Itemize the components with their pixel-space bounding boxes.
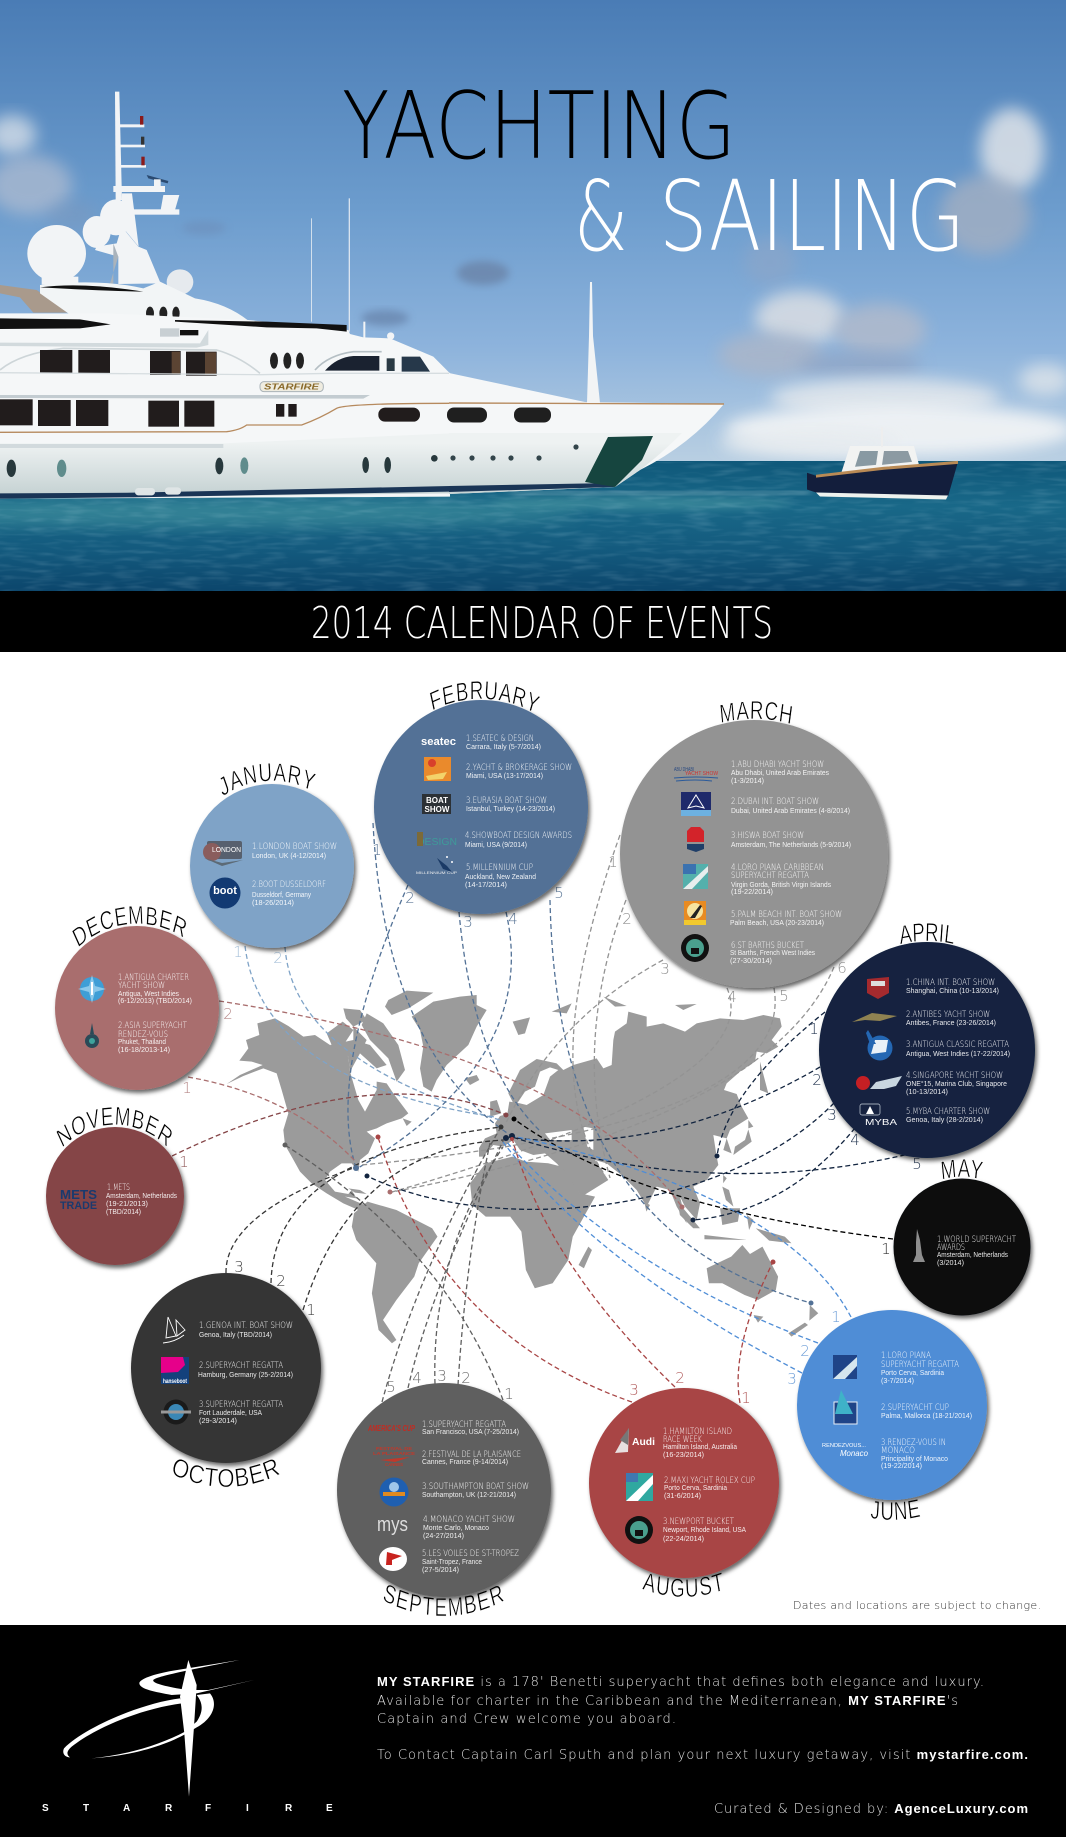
route numbers: 1 xyxy=(179,1153,189,1171)
event 4: Loro Piana Caribbean Superyacht Regatta xyxy=(683,863,831,896)
panel: August xyxy=(588,1388,784,1597)
panel: December xyxy=(54,906,224,1096)
event 1: Antigua Charter Yacht Show: YACHT SHOW xyxy=(118,981,165,991)
event 1: Genoa International Boat Show: 1.GENOA INT. BOAT SHOW xyxy=(199,1321,293,1331)
disc xyxy=(589,1388,779,1578)
event 3: Eurasia Boat Show xyxy=(422,794,555,814)
event 1: METS: 1.METS xyxy=(107,1183,130,1193)
route numbers: 5 xyxy=(779,987,789,1005)
event 1: Loro Piana Superyacht Regatta: SUPERYACHT REGATTA xyxy=(881,1360,959,1370)
disc xyxy=(337,1383,551,1597)
route numbers: 2 xyxy=(276,1272,286,1290)
event 5: MYBA Charter Show xyxy=(860,1104,990,1127)
month label: October xyxy=(173,1459,280,1488)
event 3: Rendez-Vous in Monaco: MONACO xyxy=(881,1446,915,1456)
event 2: Dubai International Boat Show: 2.DUBAI INT. BOAT SHOW xyxy=(731,797,819,807)
event 1: Seatec: seatec xyxy=(421,736,456,748)
event 1: Loro Piana Superyacht Regatta xyxy=(833,1351,959,1385)
event 3: Newport Bucket: 3.NEWPORT BUCKET xyxy=(663,1517,735,1527)
event 4: Showboat Design Awards xyxy=(417,831,572,849)
event 3: Fort Lauderdale Superyacht Regatta: (29-3/2014) xyxy=(199,1418,237,1425)
event 2: Asia Superyacht Rendez-Vous xyxy=(85,1021,188,1054)
event 1: London Boat Show xyxy=(203,841,337,866)
event 1: METS: Amsterdam, Netherlands xyxy=(106,1193,177,1200)
event 3: HISWA Boat Show xyxy=(687,827,851,852)
event 1: World Superyacht Awards xyxy=(913,1229,1017,1267)
event 4: Monaco Yacht Show xyxy=(377,1514,515,1540)
event 3: Southampton Boat Show: 3.SOUTHAMPTON BOAT SHOW xyxy=(422,1482,529,1492)
routes: June xyxy=(503,1135,851,1373)
main yacht: aft section with mast and domes xyxy=(0,92,450,499)
event 1: Abu Dhabi Yacht Show: Abu Dhabi, United Arab Emirates xyxy=(731,770,829,777)
route numbers: 4 xyxy=(412,1369,422,1387)
event 3: Antigua Classic Regatta: 3.ANTIGUA CLASSIC REGATTA xyxy=(906,1040,1009,1050)
route numbers: 1 xyxy=(233,943,243,961)
route numbers: 4 xyxy=(508,910,518,928)
event 1: Abu Dhabi Yacht Show: YACHT SHOW xyxy=(685,771,718,777)
event 1: Antigua Charter Yacht Show: (6-12/2013) (TBD/2014) xyxy=(118,998,192,1005)
title: and Sailing xyxy=(574,160,965,273)
event 2: Asia Superyacht Rendez-Vous: (16-18/2013-14) xyxy=(118,1047,170,1054)
route numbers: 2 xyxy=(273,949,283,967)
routes: January xyxy=(245,946,500,1120)
event 1: Hamilton Island Race Week xyxy=(615,1427,737,1459)
logo: Starfire xyxy=(42,1660,333,1814)
month label: March: MARCH xyxy=(720,702,792,724)
event 3: Eurasia Boat Show: Istanbul, Turkey (14-23/2014) xyxy=(466,806,555,813)
event 2: Antibes Yacht Show: Antibes, France (23-26/2014) xyxy=(906,1020,996,1027)
event 1: Abu Dhabi Yacht Show: 1.ABU DHABI YACHT SHOW xyxy=(731,760,824,770)
event 1: London Boat Show: LONDON xyxy=(212,845,241,854)
event 2: Festival de la Plaisance: FESTIVAL DE xyxy=(376,1446,412,1451)
event 1: Genoa International Boat Show: Genoa, Italy (TBD/2014) xyxy=(199,1332,272,1339)
event 1: METS: (19-21/2013) xyxy=(106,1201,148,1208)
disc xyxy=(819,942,1035,1158)
event 3: Eurasia Boat Show: SHOW xyxy=(425,805,450,814)
portholes xyxy=(7,455,438,477)
deck 1 windows xyxy=(0,399,420,427)
event 1: America's Cup Superyacht Regatta: AMERICA'S CUP xyxy=(367,1424,415,1433)
event 3: Rendez-Vous in Monaco: 3.RENDEZ-VOUS IN xyxy=(881,1438,946,1448)
event 1: London Boat Show: 1.LONDON BOAT SHOW xyxy=(252,842,337,852)
route numbers xyxy=(179,841,922,1407)
month label: May xyxy=(941,1159,984,1179)
event 1: China International Boat Show: 1.CHINA INT. BOAT SHOW xyxy=(906,978,995,988)
event 1: Hamilton Island Race Week: RACE WEEK xyxy=(663,1435,702,1445)
month label: April xyxy=(900,923,954,944)
month label: December: DECEMBER xyxy=(72,906,186,947)
route numbers: 5 xyxy=(554,884,564,902)
event 4: Showboat Design Awards: DESIGN xyxy=(417,837,457,848)
event 5: Palm Beach International Boat Show: 5.PALM BEACH INT. BOAT SHOW xyxy=(731,910,842,920)
event 5: Les Voiles de St-Tropez xyxy=(379,1547,519,1574)
event 3: Southampton Boat Show xyxy=(380,1478,529,1506)
event 4: Showboat Design Awards: Miami, USA (9/2014) xyxy=(465,842,527,849)
panel: March xyxy=(618,702,894,994)
route numbers: 1 xyxy=(504,1385,514,1403)
route numbers: 1 xyxy=(372,841,382,859)
event 5: MYBA Charter Show: Genoa, Italy (28-2/2014) xyxy=(906,1117,983,1124)
event 5: Palm Beach International Boat Show: Palm Beach, USA (20-23/2014) xyxy=(730,920,824,927)
month label: August: AUGUST xyxy=(642,1572,722,1597)
event 4: Loro Piana Caribbean Superyacht Regatta: SUPERYACHT REGATTA xyxy=(731,871,809,881)
event 1: Abu Dhabi Yacht Show: ABU DHABI xyxy=(674,767,694,773)
routes: September xyxy=(285,1127,505,1402)
routes: August xyxy=(378,1137,773,1403)
event 4: Singapore Yacht Show: ONE°15, Marina Club, Singapore xyxy=(906,1080,1007,1088)
routes: April xyxy=(367,1012,913,1220)
month label: September xyxy=(384,1585,504,1616)
event 1: METS: METS xyxy=(60,1187,97,1202)
event 2: Hanseboot Superyacht Regatta xyxy=(161,1357,293,1385)
event 1: METS: TRADE xyxy=(60,1200,97,1212)
title: Yachting: YACHTING xyxy=(342,72,736,180)
disclaimer note: Dates and locations are subject to change. xyxy=(793,1599,1041,1612)
logo: Starfire: STARFIRE xyxy=(42,1803,333,1814)
event 4: Monaco Yacht Show: 4.MONACO YACHT SHOW xyxy=(423,1515,515,1525)
event 2: Maxi Yacht Rolex Cup: Porto Cerva, Sardinia xyxy=(664,1485,727,1492)
event 1: METS: (TBD/2014) xyxy=(106,1209,141,1216)
event 1: Hamilton Island Race Week: Audi xyxy=(632,1437,655,1448)
deck 2 windows xyxy=(40,350,217,376)
month label: February xyxy=(430,681,540,712)
event 4: Loro Piana Caribbean Superyacht Regatta: 4.LORO PIANA CARIBBEAN xyxy=(731,863,824,873)
event 1: World Superyacht Awards: AWARDS xyxy=(937,1243,965,1253)
event 2: Boot Dusseldorf: 2.BOOT DUSSELDORF xyxy=(252,880,326,890)
event 2: Festival de la Plaisance: Cannes, France (9-14/2014) xyxy=(422,1459,508,1466)
banner: 2014 calendar of events: 2014 CALENDAR OF EVENTS xyxy=(311,598,773,649)
footer panel xyxy=(0,1625,1066,1837)
month label: November xyxy=(56,1107,172,1146)
route numbers: 1 xyxy=(741,1389,751,1407)
route numbers: 1 xyxy=(881,1240,891,1258)
routes: February xyxy=(348,823,811,1303)
event 1: Abu Dhabi Yacht Show: (1-3/2014) xyxy=(731,778,764,785)
route numbers: 1 xyxy=(182,1079,192,1097)
event 2: Festival de la Plaisance: CANNES xyxy=(385,1462,403,1467)
route numbers: 1 xyxy=(608,853,618,871)
panel: November xyxy=(45,1107,189,1271)
event 1: World Superyacht Awards: 1.WORLD SUPERYACHT xyxy=(937,1235,1017,1245)
month label: September: SEPTEMBER xyxy=(384,1585,504,1616)
event 3: Antigua Classic Regatta xyxy=(866,1030,1010,1060)
about text xyxy=(377,1674,1028,1763)
routes: December xyxy=(188,1001,682,1207)
event 2: Festival de la Plaisance: LA PLAISANCE xyxy=(373,1451,415,1456)
event 5: Palm Beach International Boat Show xyxy=(684,901,842,927)
route numbers: 3 xyxy=(629,1381,639,1399)
disc xyxy=(131,1273,321,1463)
mast and radar arch xyxy=(27,92,394,340)
route numbers: 2 xyxy=(622,910,632,928)
event 5: Les Voiles de St-Tropez: Saint-Tropez, France xyxy=(422,1559,482,1566)
event 6: St Barths Bucket xyxy=(681,934,815,965)
event 3: Rendez-Vous in Monaco: Monaco xyxy=(840,1449,869,1458)
event 1: Seatec xyxy=(421,734,541,751)
event 6: St Barths Bucket: 6.ST BARTHS BUCKET xyxy=(731,941,805,951)
event 3: Rendez-Vous in Monaco: RENDEZVOUS... xyxy=(822,1443,866,1449)
month label: February: FEBRUARY xyxy=(430,681,540,712)
superstructure and hull body xyxy=(0,313,450,499)
panel: January xyxy=(189,763,359,954)
month label: May: MAY xyxy=(941,1159,984,1179)
month label: January: JANUARY xyxy=(220,763,316,796)
location dots xyxy=(282,1112,814,1306)
title: and Sailing: & xyxy=(574,160,628,273)
event 1: Hamilton Island Race Week: (16-23/2014) xyxy=(663,1452,704,1459)
event 1: Abu Dhabi Yacht Show xyxy=(674,760,829,785)
event 3: HISWA Boat Show: Amsterdam, The Netherlands (5-9/2014) xyxy=(731,842,851,849)
event 2: Antibes Yacht Show xyxy=(852,1010,996,1027)
event 1: Antigua Charter Yacht Show: 1.ANTIGUA CHARTER xyxy=(118,973,189,983)
event 2: Superyacht Cup: Palma, Mallorca (18-21/2014) xyxy=(881,1413,972,1420)
panel: October xyxy=(130,1272,326,1488)
banner: 2014 calendar of events xyxy=(0,591,1066,652)
event 2: Boot Dusseldorf: boot xyxy=(213,885,237,897)
event 2: Dubai International Boat Show xyxy=(681,792,850,816)
event 5: Millennium Cup: 5.MILLENNIUM CUP xyxy=(466,863,533,873)
event 2: Festival de la Plaisance: 2.FESTIVAL DE LA PLAISANCE xyxy=(422,1450,521,1460)
disc xyxy=(190,784,354,948)
disc xyxy=(374,700,588,914)
event 2: Superyacht Cup: 2.SUPERYACHT CUP xyxy=(881,1403,949,1413)
title: and Sailing: SAILING xyxy=(659,160,965,273)
route numbers: 4 xyxy=(850,1131,860,1149)
route numbers: 2 xyxy=(461,1369,471,1387)
event 3: Rendez-Vous in Monaco: Principality of Monaco xyxy=(881,1456,948,1463)
disc xyxy=(797,1310,987,1500)
event 3: Eurasia Boat Show: 3.EURASIA BOAT SHOW xyxy=(466,796,547,806)
event 5: Millennium Cup: Auckland, New Zealand xyxy=(465,874,536,881)
about text: Available for charter in the Caribbean and the Mediterranean, MY STARFIRE's xyxy=(377,1693,958,1709)
event 3: Fort Lauderdale Superyacht Regatta: Fort Lauderdale, USA xyxy=(199,1410,262,1417)
event 6: St Barths Bucket: (27-30/2014) xyxy=(730,958,772,965)
month label: June xyxy=(870,1499,920,1520)
event 3: Rendez-Vous in Monaco: (19-22/2014) xyxy=(881,1463,922,1470)
panel: February xyxy=(372,681,594,920)
route numbers: 3 xyxy=(463,913,473,931)
route numbers: 6 xyxy=(837,959,847,977)
route numbers: 3 xyxy=(660,960,670,978)
event 5: MYBA Charter Show: MYBA xyxy=(865,1118,898,1127)
event 5: Les Voiles de St-Tropez: (27-5/2014) xyxy=(422,1567,459,1574)
route numbers: 2 xyxy=(405,889,415,907)
event 2: Yacht and Brokerage Show xyxy=(424,757,572,781)
route numbers: 3 xyxy=(787,1370,797,1388)
route numbers: 1 xyxy=(831,1308,841,1326)
event 2: Maxi Yacht Rolex Cup: (31-6/2014) xyxy=(664,1493,701,1500)
event 4: Monaco Yacht Show: Monte Carlo, Monaco xyxy=(423,1525,489,1532)
world map xyxy=(227,991,818,1343)
event 1: Hamilton Island Race Week: Hamilton Island, Australia xyxy=(663,1444,737,1451)
route lines from each month to its event locations xyxy=(172,823,913,1403)
event 1: China International Boat Show xyxy=(867,977,999,999)
event 2: Maxi Yacht Rolex Cup xyxy=(626,1473,755,1501)
route numbers: 3 xyxy=(234,1258,244,1276)
event 4: Singapore Yacht Show: 4.SINGAPORE YACHT SHOW xyxy=(906,1071,1003,1081)
event 3: Newport Bucket: (22-24/2014) xyxy=(663,1536,704,1543)
panel: September xyxy=(336,1382,556,1616)
credit: Curated & Designed by: AgenceLuxury.com xyxy=(714,1801,1028,1817)
route numbers: 3 xyxy=(827,1106,837,1124)
disc xyxy=(894,1178,1030,1316)
month label: November: NOVEMBER xyxy=(56,1107,172,1146)
route numbers: 2 xyxy=(223,1005,233,1023)
event 5: Millennium Cup: (14-17/2014) xyxy=(465,882,507,889)
event 2: Yacht and Brokerage Show: Miami, USA (13-17/2014) xyxy=(466,773,543,780)
event 1: Seatec: 1.SEATEC & DESIGN xyxy=(466,734,534,744)
bimini canopy xyxy=(0,285,68,313)
small tender boat xyxy=(510,427,958,499)
event 2: Hanseboot Superyacht Regatta: Hamburg, Germany (25-2/2014) xyxy=(198,1372,293,1379)
panel: May xyxy=(892,1159,1036,1322)
event 3: Newport Bucket: Newport, Rhode Island, USA xyxy=(663,1527,746,1534)
routes: March xyxy=(361,835,834,1192)
event 1: Hamilton Island Race Week: 1.HAMILTON ISLAND xyxy=(663,1427,732,1437)
hero photo: yacht at sea xyxy=(0,0,1066,591)
route numbers: 1 xyxy=(306,1301,316,1319)
event 3: Newport Bucket xyxy=(625,1516,746,1544)
event 2: Maxi Yacht Rolex Cup: 2.MAXI YACHT ROLEX CUP xyxy=(664,1476,755,1486)
event 2: Antibes Yacht Show: 2.ANTIBES YACHT SHOW xyxy=(906,1010,990,1020)
event 1: Antigua Charter Yacht Show: Antigua, West Indies xyxy=(118,991,179,998)
event 1: America's Cup Superyacht Regatta: San Francisco, USA (7-25/2014) xyxy=(422,1429,519,1436)
panel: April xyxy=(818,923,1040,1164)
name plate xyxy=(260,382,323,392)
event 5: Millennium Cup: MILLENNIUM CUP xyxy=(416,870,457,875)
top deck xyxy=(40,282,248,321)
event 1: Genoa International Boat Show xyxy=(163,1317,293,1343)
event 3: HISWA Boat Show: 3.HISWA BOAT SHOW xyxy=(731,831,804,841)
route numbers: 3 xyxy=(437,1367,447,1385)
routes: October xyxy=(226,1127,503,1310)
event 2: Dubai International Boat Show: Dubai, United Arab Emirates (4-8/2014) xyxy=(731,808,850,815)
event 3: Southampton Boat Show: Southampton, UK (12-21/2014) xyxy=(422,1492,516,1499)
event 3: Eurasia Boat Show: BOAT xyxy=(426,796,448,805)
route numbers: 5 xyxy=(912,1155,922,1173)
event 5: Millennium Cup xyxy=(416,856,536,889)
event 2: Superyacht Cup xyxy=(834,1390,972,1424)
event 5: MYBA Charter Show: 5.MYBA CHARTER SHOW xyxy=(906,1107,990,1117)
about text: Captain and Crew welcome you aboard. xyxy=(377,1712,676,1727)
event 2: Hanseboot Superyacht Regatta: 2.SUPERYACHT REGATTA xyxy=(199,1361,283,1371)
event 3: Antigua Classic Regatta: Antigua, West Indies (17-22/2014) xyxy=(906,1051,1010,1058)
event 4: Monaco Yacht Show: (24-27/2014) xyxy=(423,1533,464,1540)
event 4: Showboat Design Awards: 4.SHOWBOAT DESIGN AWARDS xyxy=(465,831,572,841)
month label: January xyxy=(220,763,316,796)
event 4: Singapore Yacht Show xyxy=(856,1071,1007,1096)
event 3: Rendez-Vous in Monaco xyxy=(822,1438,948,1470)
event 3: Fort Lauderdale Superyacht Regatta xyxy=(161,1400,283,1425)
about text: To Contact Captain Carl Sputh and plan your next luxury getaway, visit mystarfire.com. xyxy=(377,1747,1028,1763)
route numbers: 5 xyxy=(386,1378,396,1396)
event 2: Boot Dusseldorf: (18-26/2014) xyxy=(252,900,294,907)
event 4: Singapore Yacht Show: (10-13/2014) xyxy=(906,1089,948,1096)
route numbers: 1 xyxy=(809,1020,819,1038)
event 1: China International Boat Show: Shanghai, China (10-13/2014) xyxy=(906,988,999,995)
event 2: Hanseboot Superyacht Regatta: hanseboot xyxy=(163,1378,188,1385)
event 3: Fort Lauderdale Superyacht Regatta: 3.SUPERYACHT REGATTA xyxy=(199,1400,283,1410)
event 1: Loro Piana Superyacht Regatta: 1.LORO PIANA xyxy=(881,1351,931,1361)
event 1: America's Cup Superyacht Regatta: 1.SUPERYACHT REGATTA xyxy=(422,1420,506,1430)
month label: April: APRIL xyxy=(900,923,954,944)
name plate: STARFIRE xyxy=(264,382,320,391)
event 1: METS xyxy=(60,1183,177,1216)
event 2: Festival de la Plaisance xyxy=(373,1446,521,1467)
routes: May xyxy=(514,1119,893,1239)
month label: August xyxy=(642,1572,722,1597)
main yacht: bow section xyxy=(447,282,724,494)
event 2: Asia Superyacht Rendez-Vous: Phuket, Thailand xyxy=(118,1039,166,1046)
event 4: Loro Piana Caribbean Superyacht Regatta: Virgin Gorda, British Virgin Islands xyxy=(731,882,831,889)
event 1: Antigua Charter Yacht Show xyxy=(78,973,192,1005)
event 2: Boot Dusseldorf: Dusseldorf, Germany xyxy=(252,892,311,899)
event 6: St Barths Bucket: St Barths, French West Indies xyxy=(730,950,815,957)
month label: June: JUNE xyxy=(870,1499,920,1520)
event 2: Asia Superyacht Rendez-Vous: RENDEZ-VOUS xyxy=(118,1030,168,1040)
disc xyxy=(55,926,219,1090)
event 2: Yacht and Brokerage Show: 2.YACHT & BROKERAGE SHOW xyxy=(466,763,572,773)
event 5: Les Voiles de St-Tropez: 5.LES VOILES DE ST-TROPEZ xyxy=(422,1549,519,1559)
event 1: America's Cup Superyacht Regatta xyxy=(367,1420,519,1436)
event 2: Boot Dusseldorf xyxy=(210,878,326,908)
disc xyxy=(620,720,888,988)
event 1: World Superyacht Awards: Amsterdam, Netherlands xyxy=(937,1252,1008,1259)
route numbers: 2 xyxy=(675,1369,685,1387)
month label: March xyxy=(720,702,792,724)
month label: October: OCTOBER xyxy=(173,1459,280,1488)
about text: MY STARFIRE is a 178' Benetti superyacht that defines both elegance and luxury. xyxy=(377,1674,984,1690)
event 2: Asia Superyacht Rendez-Vous: 2.ASIA SUPERYACHT xyxy=(118,1021,188,1031)
event 1: World Superyacht Awards: (3/2014) xyxy=(937,1260,964,1267)
event 1: Seatec: Carrara, Italy (5-7/2014) xyxy=(466,744,541,751)
panel: June xyxy=(796,1310,992,1520)
route numbers: 4 xyxy=(727,988,737,1006)
route numbers: 2 xyxy=(800,1342,810,1360)
disc xyxy=(46,1127,184,1265)
routes: November xyxy=(172,1094,506,1156)
event 1: Loro Piana Superyacht Regatta: Porto Cerva, Sardinia xyxy=(881,1370,944,1377)
event 1: London Boat Show: London, UK (4-12/2014) xyxy=(252,853,326,860)
clouds xyxy=(0,108,1066,456)
event 1: Loro Piana Superyacht Regatta: (3-7/2014) xyxy=(881,1378,914,1385)
event 4: Loro Piana Caribbean Superyacht Regatta: (19-22/2014) xyxy=(731,889,773,896)
route numbers: 2 xyxy=(812,1071,822,1089)
event 4: Monaco Yacht Show: mys xyxy=(377,1514,408,1536)
